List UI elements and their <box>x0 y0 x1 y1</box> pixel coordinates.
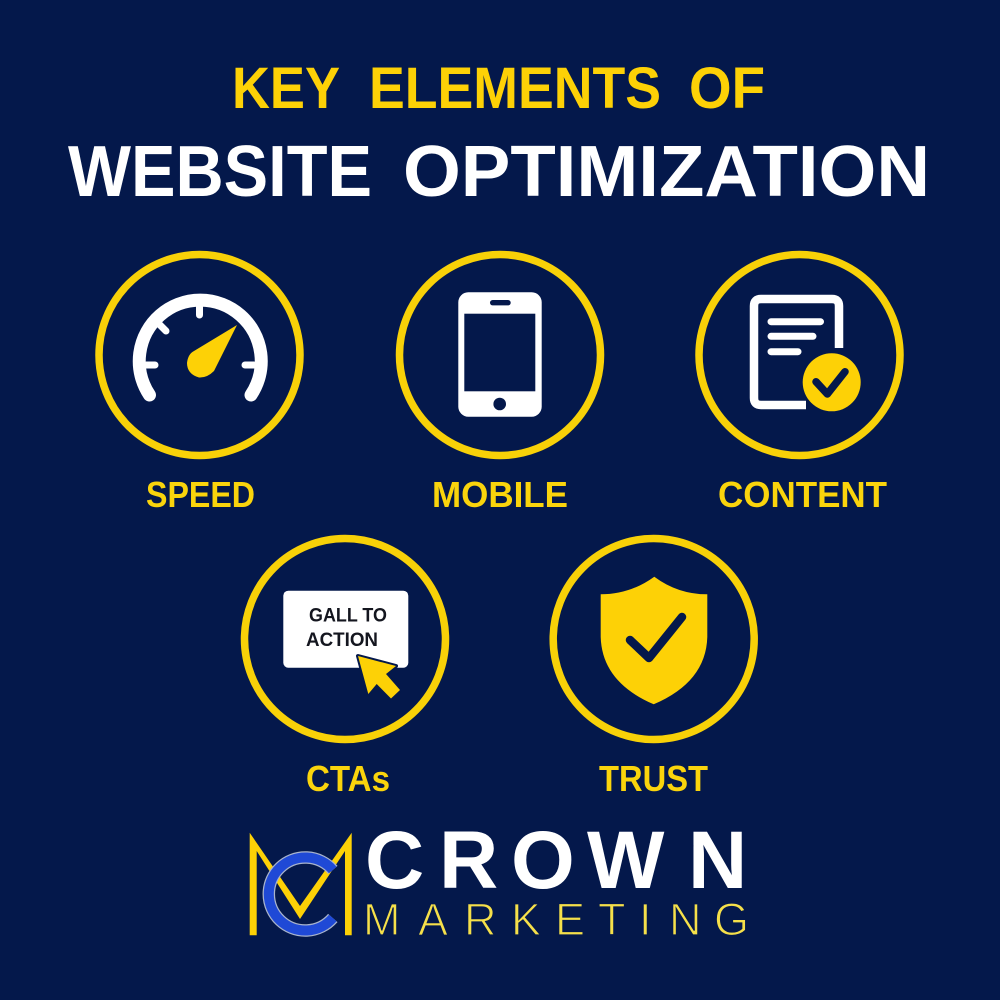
title line 1 <box>232 56 765 121</box>
content label: CONTENT <box>718 474 887 515</box>
title line 1: OF <box>689 56 765 121</box>
wordmark: MARKETING: MARKETING <box>363 894 749 945</box>
icon: smartphone <box>458 292 542 417</box>
mobile ring <box>400 254 600 456</box>
trust ring <box>553 538 754 740</box>
CTA label: CTAs <box>306 758 390 799</box>
panel: trust <box>553 538 754 799</box>
icon: speedometer <box>139 300 261 395</box>
panel: CTAs <box>244 538 446 799</box>
speed ring <box>99 254 300 456</box>
title line 1: ELEMENTS <box>369 56 661 121</box>
panel: mobile <box>400 254 600 515</box>
title line 1: KEY <box>232 56 340 121</box>
title line 2: OPTIMIZATION <box>403 132 930 212</box>
panel: speed <box>99 254 300 515</box>
icon: shield with check <box>601 577 707 704</box>
trust label: TRUST <box>599 758 708 799</box>
icon: call to action button <box>283 591 408 698</box>
icon: document with check <box>754 299 861 411</box>
title <box>68 56 930 212</box>
logo mark <box>250 833 352 935</box>
CTA ring <box>244 538 446 740</box>
logo: Crown Marketing <box>250 815 749 945</box>
title line 2 <box>68 132 930 212</box>
icon: call to action button: GALL TO <box>309 606 387 627</box>
content ring <box>699 254 900 456</box>
title line 2: WEBSITE <box>68 132 372 212</box>
panel: content <box>699 254 900 515</box>
wordmark: CROWN: CROWN <box>365 815 747 906</box>
mobile label: MOBILE <box>432 474 568 515</box>
icon: call to action button: ACTION <box>306 630 378 651</box>
speed label: SPEED <box>146 474 255 515</box>
